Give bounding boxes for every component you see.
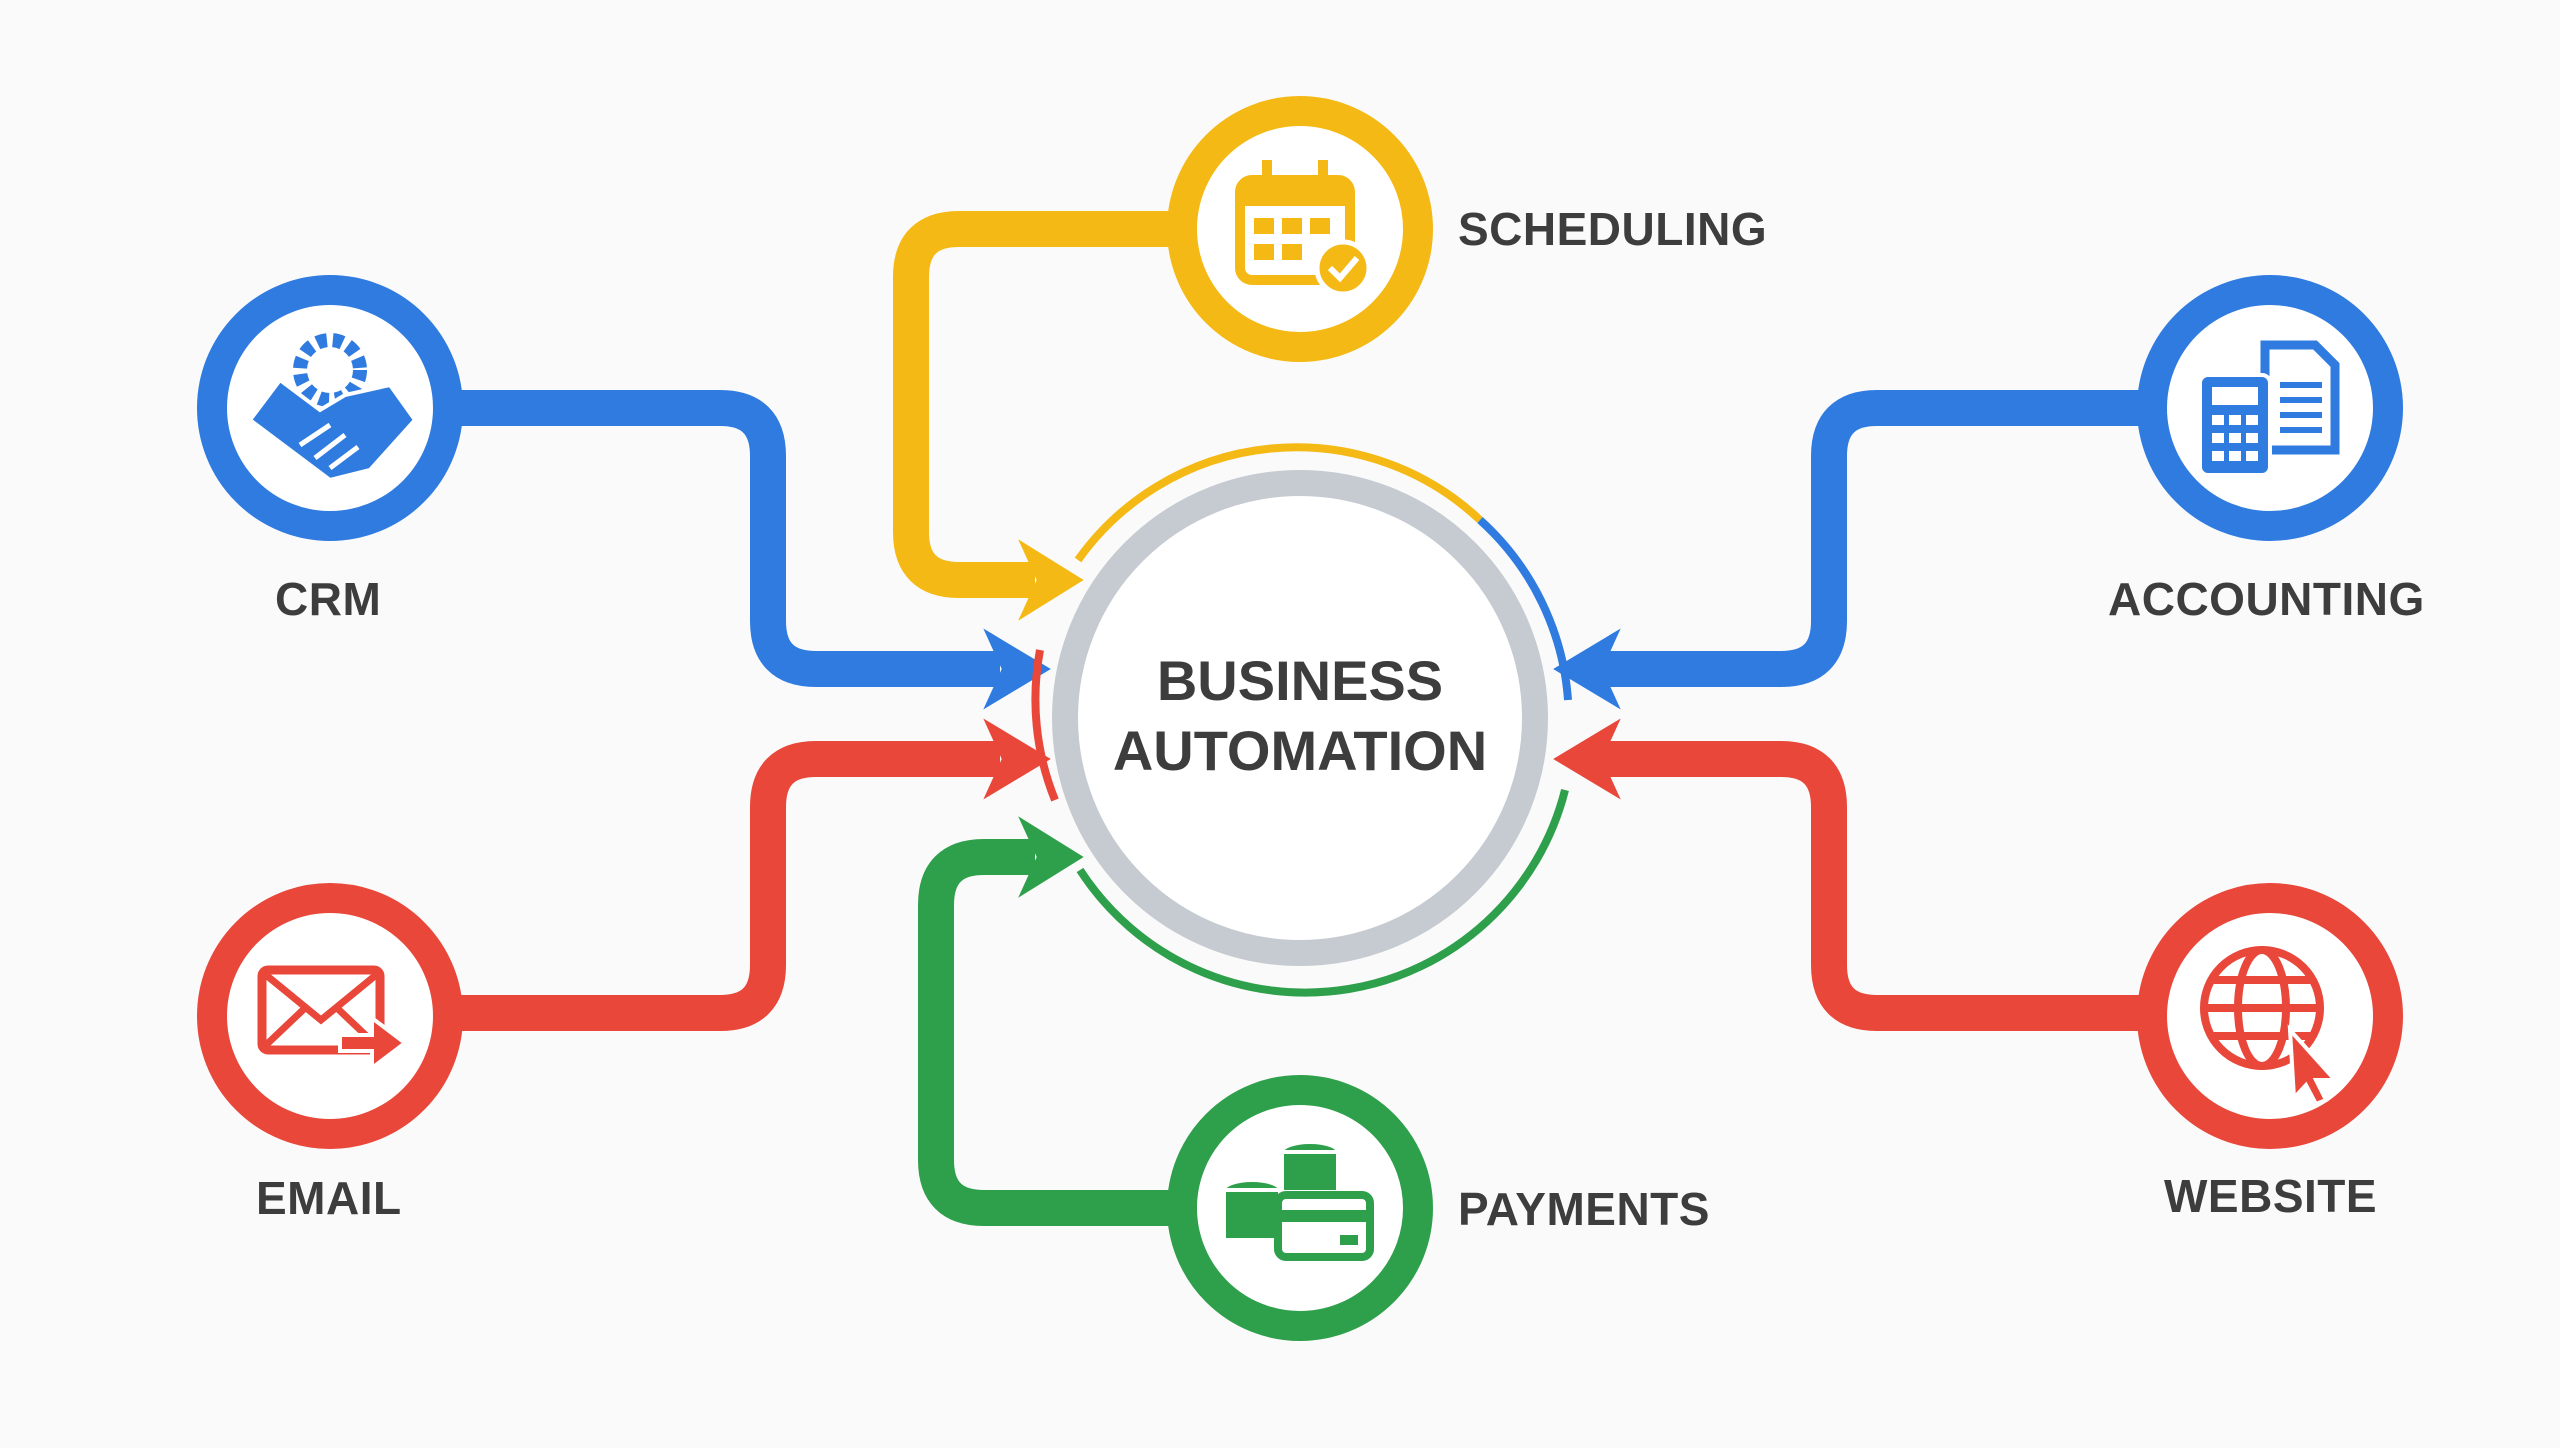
connector: Accounting bbox=[1559, 408, 2150, 702]
connector: Website bbox=[1559, 726, 2150, 1013]
connector: Payments bbox=[936, 824, 1180, 1208]
label: Scheduling: SCHEDULING bbox=[1458, 203, 1767, 255]
hub: center circle: BUSINESS bbox=[1157, 649, 1443, 712]
connector: CRM bbox=[440, 408, 1045, 702]
label: Accounting: ACCOUNTING bbox=[2108, 573, 2425, 625]
connector: Scheduling bbox=[911, 229, 1180, 613]
connector: Email bbox=[440, 726, 1045, 1013]
node: Email bbox=[212, 898, 448, 1134]
node: Scheduling bbox=[1182, 111, 1418, 347]
label: Email: EMAIL bbox=[256, 1172, 402, 1224]
label: CRM: CRM bbox=[275, 573, 381, 625]
label: Payments: PAYMENTS bbox=[1458, 1183, 1710, 1235]
label: Website: WEBSITE bbox=[2164, 1170, 2377, 1222]
node: Accounting bbox=[2152, 290, 2388, 526]
node: Website bbox=[2152, 898, 2388, 1134]
hub: center circle bbox=[1065, 483, 1535, 953]
node: CRM bbox=[212, 290, 448, 526]
hub: outer colored ring bbox=[1035, 447, 1568, 993]
hub: center circle: AUTOMATION bbox=[1113, 719, 1487, 782]
node: Payments bbox=[1182, 1090, 1418, 1326]
